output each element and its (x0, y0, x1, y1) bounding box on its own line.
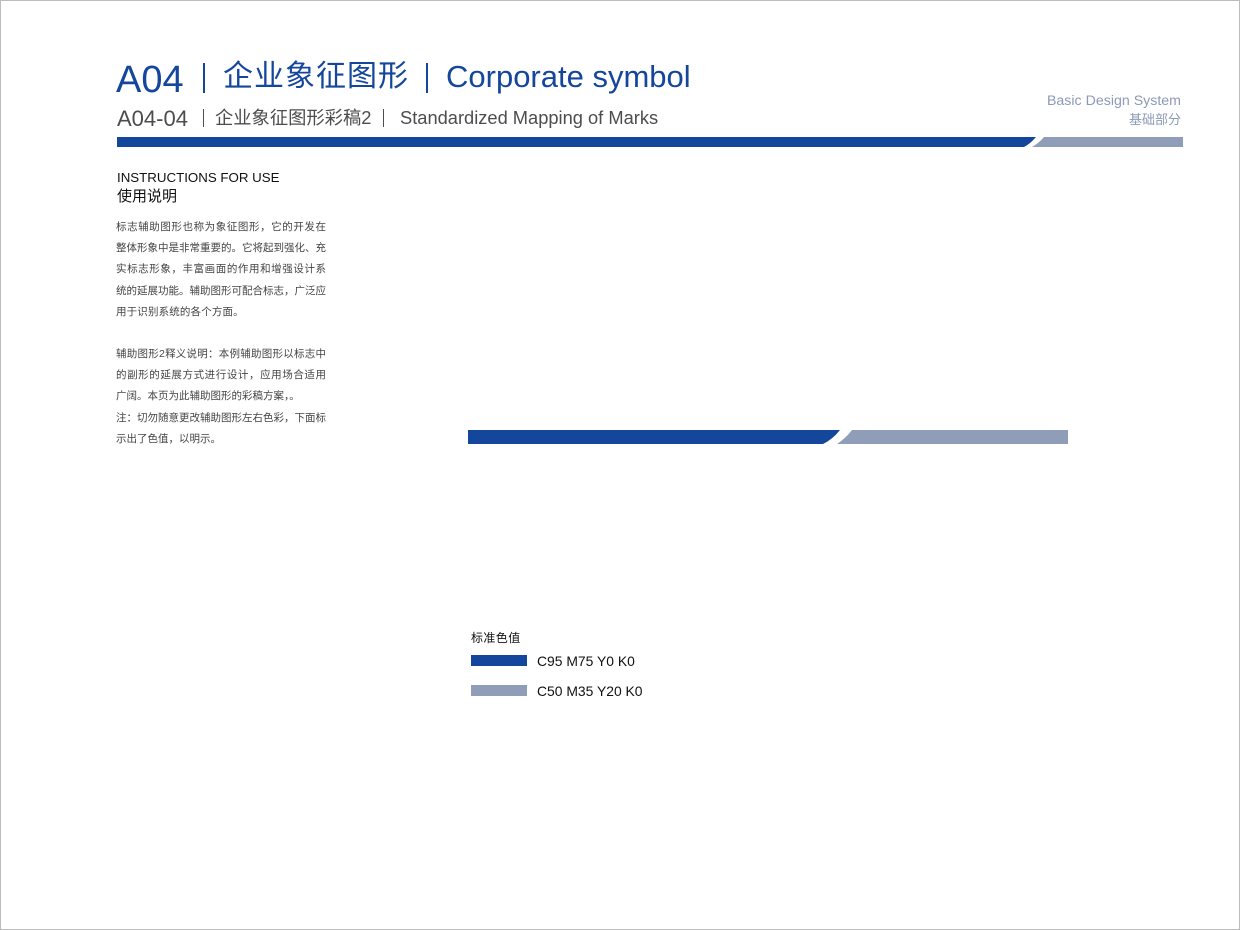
title: section code: A04 (116, 59, 184, 101)
title: Chinese heading: 企业象征图形 (223, 60, 409, 93)
instructions paragraph 1: 用于识别系统的各个方面。 (116, 306, 244, 318)
colour legend title: 标准色值 (471, 631, 521, 645)
subtitle: English name: Standardized Mapping of Marks (400, 107, 658, 128)
subtitle: page code: A04-04 (117, 106, 188, 131)
section label: Chinese: 基础部分 (1129, 112, 1181, 127)
instructions paragraph 2: 广阔。本页为此辅助图形的彩稿方案，。 (116, 390, 300, 402)
instructions paragraph 1: 标志辅助图形也称为象征图形，它的开发在 (116, 221, 326, 233)
instructions paragraph 2: 示出了色值，以明示。 (116, 433, 221, 445)
subtitle: Chinese name: 企业象征图形彩稿2 (215, 107, 371, 128)
instructions paragraph 2 (116, 348, 326, 445)
instructions paragraph 1 (116, 221, 326, 318)
instructions paragraph 2: 注：切勿随意更改辅助图形左右色彩，下面标 (116, 412, 326, 424)
title: English heading: Corporate symbol (446, 59, 691, 94)
instructions paragraph 1: 整体形象中是非常重要的。它将起到强化、充 (116, 242, 326, 254)
instructions heading: Chinese: 使用说明 (117, 188, 177, 205)
instructions paragraph 2: 的副形的延展方式进行设计，应用场合适用 (116, 369, 326, 381)
section label: English: Basic Design System (1047, 93, 1181, 109)
instructions paragraph 2: 辅助图形2释义说明：本例辅助图形以标志中 (116, 348, 326, 360)
instructions paragraph 1: 统的延展功能。辅助图形可配合标志，广泛应 (116, 285, 326, 297)
colour value: grey-blue: C50 M35 Y20 K0 (537, 683, 643, 699)
colour value: blue: C95 M75 Y0 K0 (537, 653, 635, 669)
colour swatch: grey-blue (471, 685, 527, 696)
colour swatch: blue (471, 655, 527, 666)
instructions paragraph 1: 实标志形象，丰富画面的作用和增强设计系 (116, 263, 326, 275)
instructions heading: English: INSTRUCTIONS FOR USE (117, 170, 280, 185)
